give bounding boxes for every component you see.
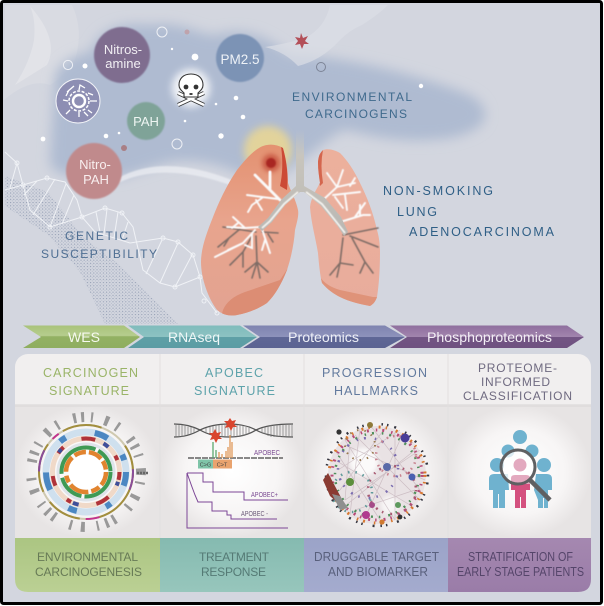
chart: APOBEC signature and survival curve: APOBEC+ (251, 492, 278, 499)
bubble: Nitrosamine: Nitros- (104, 42, 142, 57)
heading: non-smoking lung adenocarcinoma: LUNG (397, 205, 437, 219)
icon: skull and crossbones (172, 69, 210, 107)
chart: APOBEC signature and survival curve: C>T (217, 462, 228, 468)
illustration: lungs (195, 126, 385, 320)
arrow: WES: WES (68, 329, 100, 345)
icon: DNA strand (174, 424, 293, 437)
heading: environmental carcinogens: ENVIRONMENTAL (292, 90, 412, 104)
chart: APOBEC signature and survival curve (174, 418, 293, 528)
bubble: PM2.5: PM2.5 (220, 52, 260, 67)
panel: footer treatment response (160, 538, 304, 592)
DNA helix: genetic susceptibility (5, 152, 219, 324)
panel: results table background (15, 354, 591, 592)
arrow: Phosphoproteomics: Phosphoproteomics (427, 329, 552, 345)
chart: APOBEC signature and survival curve: APOBEC - (241, 511, 269, 518)
arrow: Proteomics: Proteomics (288, 329, 359, 345)
heading: non-smoking lung adenocarcinoma: NON-SMOKING (383, 184, 493, 198)
left lung (201, 144, 298, 316)
chart: APOBEC signature and survival curve: APOBEC (254, 450, 280, 457)
heading: carcinogen signature: CARCINOGEN (43, 366, 138, 380)
bubble: Nitro-PAH (66, 143, 122, 199)
panel: footer environmental carcinogenesis (15, 538, 160, 592)
right lung (310, 149, 380, 306)
heading: environmental carcinogens: CARCINOGENS (305, 107, 407, 121)
arrow: Phosphoproteomics (390, 326, 584, 348)
panel: mid image cells (15, 354, 591, 538)
bubble: PAH (127, 102, 165, 140)
heading: proteome-informed classification: PROTEOME- (478, 361, 557, 375)
chart: protein network (323, 422, 428, 526)
icon: people under magnifying glass (489, 430, 552, 508)
arrow: Proteomics (243, 326, 405, 348)
chart: APOBEC signature and survival curve: C>G (200, 462, 211, 468)
panel: footer stratification of early stage patients (448, 538, 591, 592)
panel: footer environmental carcinogenesis: ENVIRONMENTAL (37, 550, 138, 564)
bubble: Nitrosamine: amine (105, 56, 141, 71)
bubble: Nitro-PAH: PAH (83, 172, 109, 187)
heading: APOBEC signature: SIGNATURE (194, 384, 275, 398)
bubble: PM2.5 (216, 34, 264, 82)
heading: non-smoking lung adenocarcinoma: ADENOCARCINOMA (409, 225, 555, 239)
panel: footer stratification of early stage patients: EARLY STAGE PATIENTS (457, 565, 584, 579)
heading: progression hallmarks: PROGRESSION (322, 366, 427, 380)
arrow: RNAseq: RNAseq (168, 329, 220, 345)
heading: APOBEC signature: APOBEC (205, 366, 263, 380)
panel: footer druggable target and biomarker (304, 538, 448, 592)
panel: footer druggable target and biomarker: AND BIOMARKER (328, 565, 428, 579)
bubble: PAH: PAH (133, 114, 159, 129)
heading: environmental carcinogens (292, 90, 412, 121)
panel: footer treatment response: RESPONSE (201, 565, 266, 579)
heading: carcinogen signature: SIGNATURE (49, 384, 129, 398)
heading: progression hallmarks: HALLMARKS (334, 384, 418, 398)
heading: APOBEC signature (194, 366, 275, 398)
trachea (258, 130, 348, 236)
bubble: Nitrosamine (94, 27, 150, 83)
panel: environmental carcinogens cloud (4, 5, 485, 193)
heading: non-smoking lung adenocarcinoma (383, 184, 555, 239)
heading: proteome-informed classification: CLASSIFICATION (463, 389, 572, 403)
panel: footer treatment response: TREATMENT (199, 550, 270, 564)
bronchi white (215, 170, 370, 257)
heading: carcinogen signature (43, 366, 138, 398)
panel: footer stratification of early stage patients: STRATIFICATION OF (468, 550, 573, 564)
heading: genetic susceptibility (41, 229, 157, 261)
arrow: RNAseq (128, 326, 257, 348)
heading: genetic susceptibility: SUSCEPTIBILITY (41, 247, 157, 261)
bronchi dark (218, 227, 378, 278)
bubble: Nitro-PAH: Nitro- (79, 157, 111, 172)
arrow: WES (23, 326, 140, 348)
icon: particle ring (56, 79, 100, 123)
panel: footer druggable target and biomarker: DRUGGABLE TARGET (314, 550, 439, 564)
chart: circos plot (31, 417, 149, 527)
heading: genetic susceptibility: GENETIC (65, 229, 128, 243)
heading: progression hallmarks (322, 366, 427, 398)
icon: small particles (41, 27, 423, 151)
heading: proteome-informed classification: INFORMED (481, 375, 550, 389)
heading: proteome-informed classification (463, 361, 572, 403)
panel: footer environmental carcinogenesis: CARCINOGENESIS (35, 565, 142, 579)
